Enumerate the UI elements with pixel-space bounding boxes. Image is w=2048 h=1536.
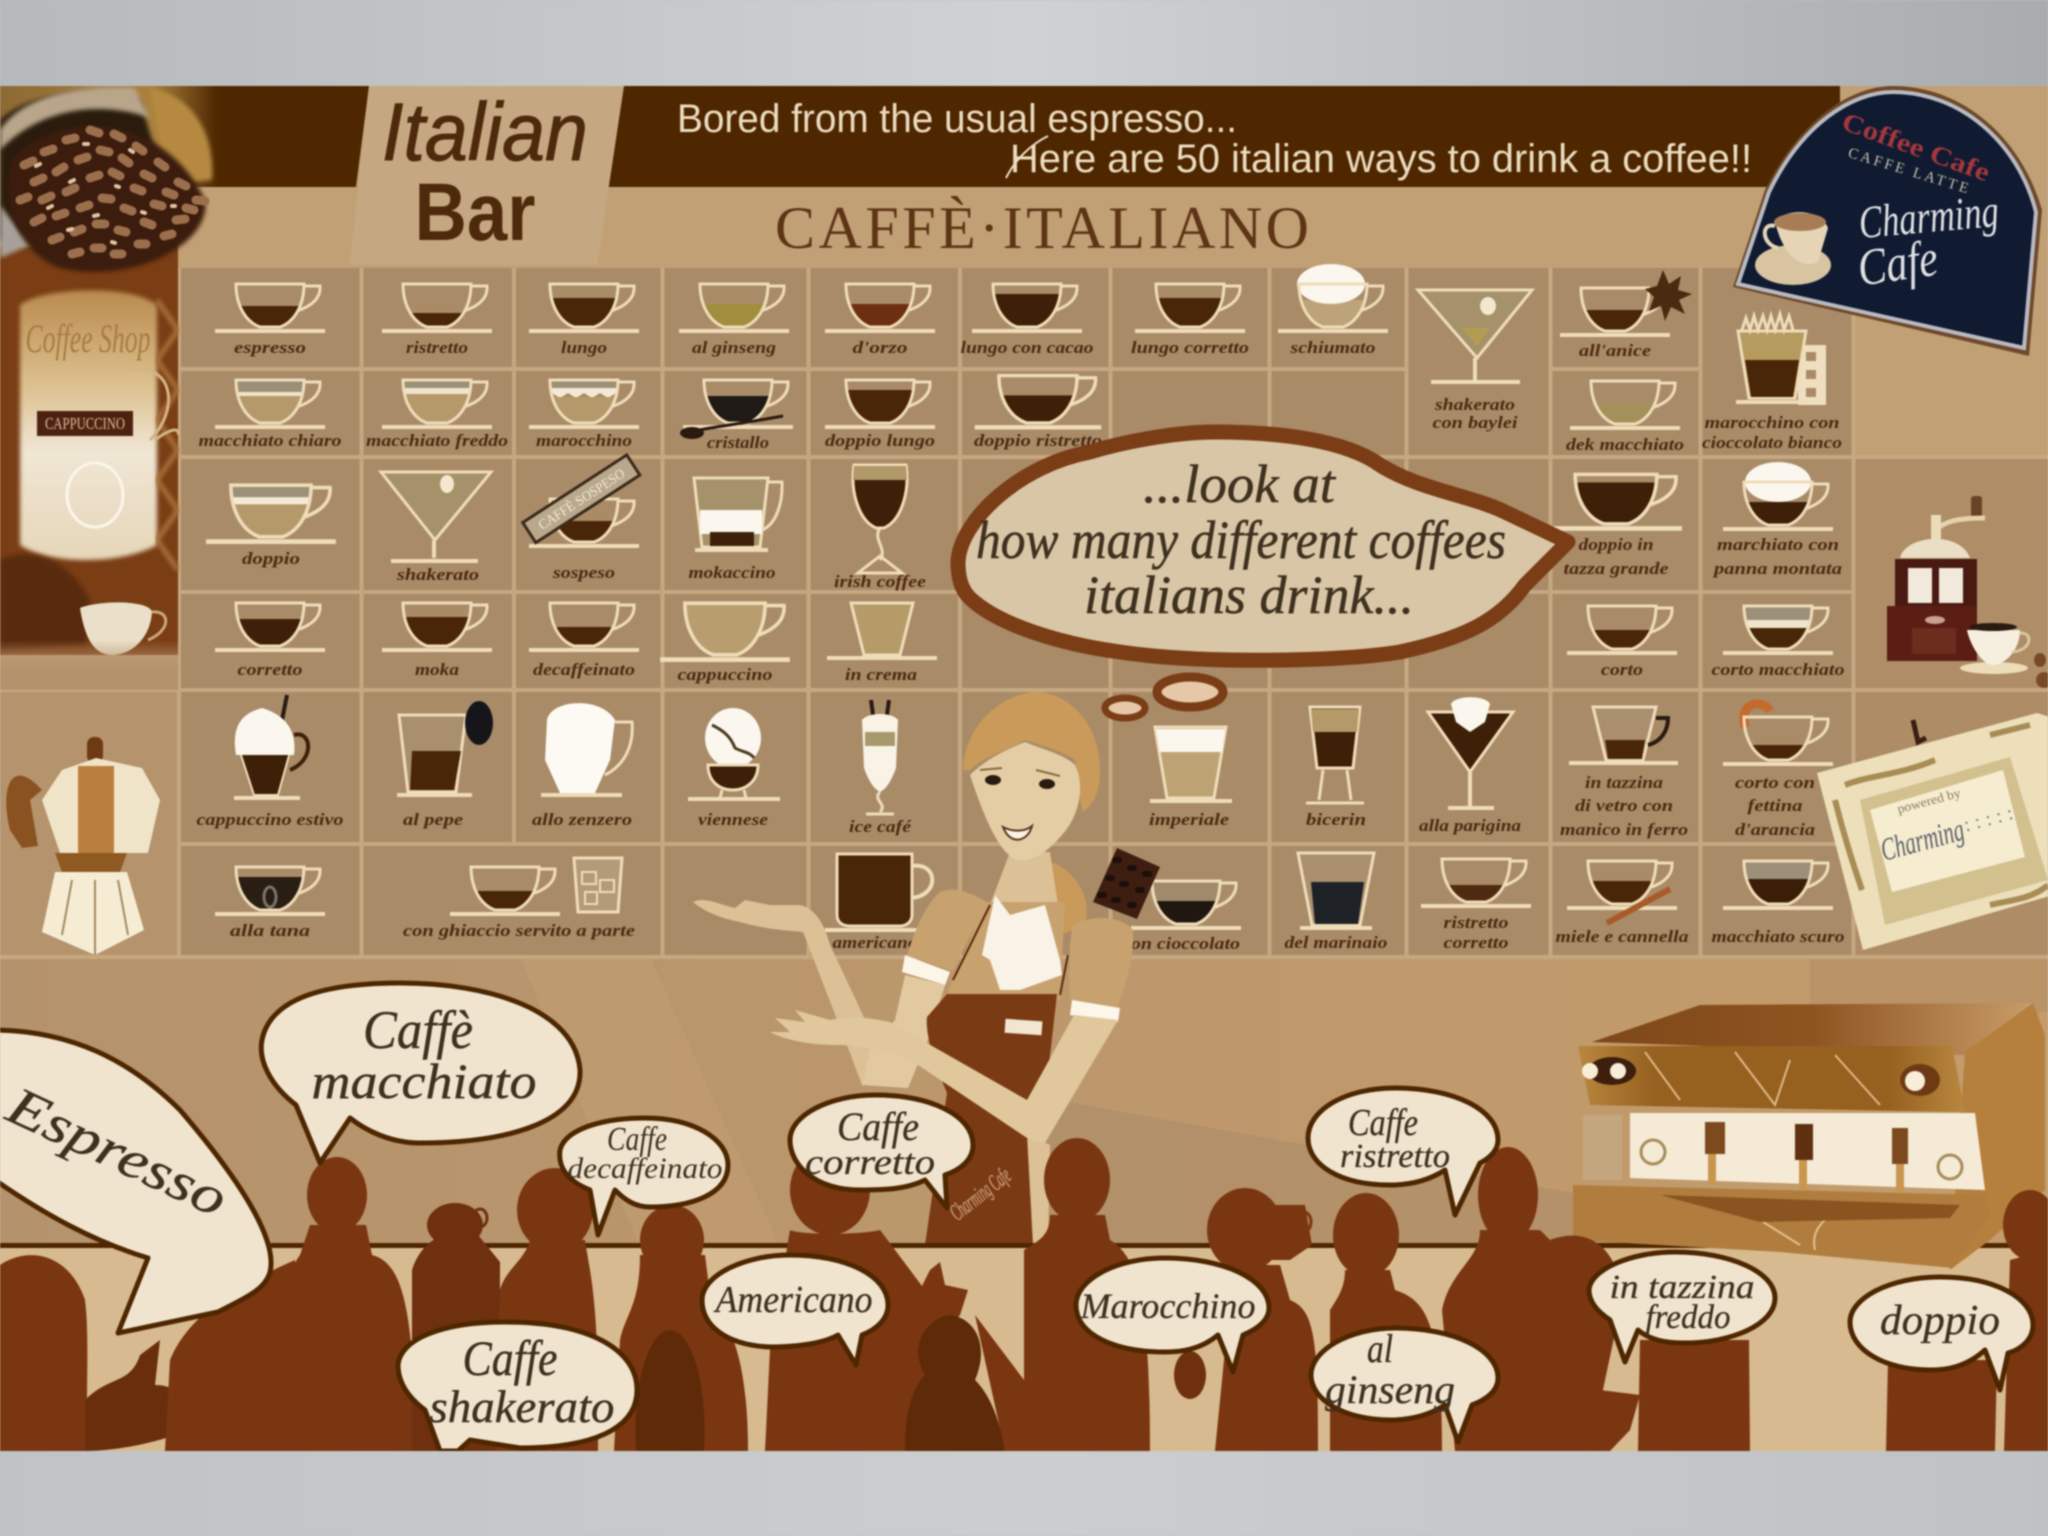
glass: cappuccino estivo: cappuccino estivo <box>196 810 344 829</box>
charming cafe logo on apron: Charming Cafe <box>945 1163 1016 1226</box>
framed sponsor picture: Charming <box>1876 811 1968 868</box>
cup: macchiato freddo <box>366 380 508 450</box>
speech bubble: Caffe corretto: corretto <box>805 1142 935 1182</box>
tin label: CAPPUCCINO <box>45 414 125 433</box>
cup: ristretto corretto <box>1421 859 1531 952</box>
glass: ice café: ice café <box>849 817 913 836</box>
cup: corto <box>1567 606 1677 679</box>
cup: mokaccino: mokaccino <box>688 563 776 582</box>
tin label <box>20 290 178 570</box>
cup: corto con fettina d'arancia: fettina <box>1748 796 1803 815</box>
speech bubble: Caffe decaffeinato <box>560 1118 728 1235</box>
speech bubble: Americano <box>702 1255 888 1365</box>
hair back and ponytail <box>1045 860 1087 935</box>
cup: cristallo: cristallo <box>707 433 769 452</box>
café sign: Charming <box>1857 185 2001 248</box>
glass: shakerato con baylei: shakerato <box>1434 395 1515 414</box>
person: fifth <box>495 1168 598 1451</box>
person: second <box>165 1260 295 1451</box>
cup: moka <box>382 603 492 679</box>
cup: marchiato con panna montata <box>1712 462 1843 578</box>
person: far right <box>2003 1190 2048 1451</box>
mug: americano <box>825 854 932 952</box>
speech bubble: doppio <box>1850 1277 2033 1390</box>
left sleeve <box>907 890 987 971</box>
hair <box>963 692 1100 812</box>
machine lights <box>1582 1057 1940 1096</box>
cup: espresso <box>215 284 325 357</box>
cup: doppio in tazza grande: tazza grande <box>1564 559 1669 578</box>
cup: con cioccolato <box>1122 881 1241 953</box>
glass: cappuccino estivo <box>196 695 344 829</box>
cup: d'orzo: d'orzo <box>852 338 908 357</box>
cup: doppio: doppio <box>242 549 300 568</box>
cup: sospeso with receipt: sospeso <box>552 563 615 582</box>
cup: lungo con cacao <box>960 284 1094 357</box>
cup: decaffeinato <box>529 603 639 679</box>
wall background <box>0 85 2048 667</box>
tagline <box>677 97 1752 181</box>
cup: lungo <box>529 284 639 357</box>
coffee grid panel <box>0 268 2048 957</box>
cup: ristretto: ristretto <box>406 338 468 357</box>
waitress <box>693 692 1160 1245</box>
counter <box>0 1243 2048 1451</box>
glass: in crema: in crema <box>845 665 918 684</box>
glass: al pepe <box>397 701 493 829</box>
row 5 cups <box>196 695 1833 839</box>
cup: d'orzo <box>825 284 935 357</box>
person: drinking <box>412 1203 500 1451</box>
glass: in crema <box>827 603 937 684</box>
left upper arm <box>862 975 945 1088</box>
cup: doppio lungo: doppio lungo <box>825 431 935 450</box>
glass: shakerato <box>381 472 491 584</box>
left cuff <box>902 955 950 985</box>
speech bubble: look at how many different coffees italians drink: italians drink... <box>1084 565 1414 625</box>
speech bubble: Caffè macchiato: macchiato <box>312 1053 536 1109</box>
cup: dek macchiato: dek macchiato <box>1566 435 1684 454</box>
cup: lungo corretto: lungo corretto <box>1131 338 1249 357</box>
speech bubble: Caffe ristretto: ristretto <box>1340 1138 1450 1175</box>
glass: bicerin: bicerin <box>1306 810 1366 829</box>
glass: imperiale: imperiale <box>1149 810 1230 829</box>
glass: in tazzina di vetro con manico in ferro: di vetro con <box>1575 796 1673 815</box>
cup: miele e cannella <box>1556 861 1689 946</box>
chocolates <box>0 554 90 650</box>
header bar <box>215 86 1840 265</box>
row 3 cups <box>206 455 1843 591</box>
face <box>970 742 1080 860</box>
speech bubble: al ginseng: ginseng <box>1325 1367 1455 1412</box>
speech bubble: Marocchino: Marocchino <box>1079 1286 1256 1326</box>
speech bubble: in tazzina freddo: in tazzina <box>1610 1269 1754 1306</box>
cup: alla tana <box>215 867 325 940</box>
hand holding cup <box>85 1340 188 1451</box>
glass: in tazzina di vetro con manico in ferro: manico in ferro <box>1560 820 1688 839</box>
cup: cappuccino <box>660 603 790 684</box>
cup: corto con fettina d'arancia: d'arancia <box>1735 820 1816 839</box>
glass: in tazzina di vetro con manico in ferro: in tazzina <box>1585 773 1664 792</box>
left forearm and hand <box>693 900 905 1085</box>
speech bubble: in tazzina freddo <box>1589 1252 1775 1362</box>
row 1 cups <box>215 264 1842 452</box>
cup: sospeso with receipt <box>523 455 640 582</box>
café sign <box>1733 86 2042 356</box>
cup: ristretto corretto: ristretto <box>1444 913 1508 932</box>
cup: decaffeinato: decaffeinato <box>533 660 635 679</box>
speech bubble: Caffe corretto: Caffe <box>837 1104 919 1149</box>
cup: ristretto <box>382 284 492 357</box>
coffee bean sack and tin <box>0 86 218 690</box>
row 6 cups <box>215 853 1844 953</box>
speech bubble: Espresso: Espresso <box>0 1074 237 1229</box>
speech bubble: look at how many different coffees italians drink: ...look at <box>1143 454 1337 514</box>
Italian Bar label: Italian <box>382 87 588 178</box>
raised hand <box>900 1262 968 1345</box>
cup: macchiato chiaro: macchiato chiaro <box>198 431 342 450</box>
cup: macchiato scuro <box>1712 861 1844 946</box>
glass: al pepe: al pepe <box>403 810 464 829</box>
coffee beans <box>8 126 205 272</box>
chocolate bar <box>1093 848 1160 919</box>
glass: shakerato: shakerato <box>396 565 479 584</box>
framed sponsor picture: powered by <box>1896 785 1963 816</box>
glass: shakerato con baylei: con baylei <box>1432 413 1518 432</box>
sign cup <box>1755 212 1831 285</box>
glass: alla parigina <box>1419 697 1522 835</box>
tin label: Coffee Shop <box>26 316 150 361</box>
cup: marocchino: marocchino <box>536 431 632 450</box>
person: under tazzina bubble <box>1638 1340 1750 1451</box>
cup: doppio <box>206 485 336 568</box>
raised arm <box>975 1315 1024 1451</box>
speech bubble: look at how many different coffees italians drink <box>958 432 1568 660</box>
cup: cappuccino: cappuccino <box>678 665 772 684</box>
cup: corto: corto <box>1601 660 1643 679</box>
neck <box>990 852 1058 905</box>
café sign: CAFFE LATTE <box>1846 145 1970 197</box>
person: seventh <box>765 1145 925 1451</box>
cup: corto con fettina d'arancia <box>1723 704 1833 839</box>
bottom grey strip <box>0 1451 2048 1536</box>
framed sponsor picture: ::::: <box>1961 802 2015 836</box>
cup: lungo con cacao: lungo con cacao <box>960 338 1094 357</box>
Italian Bar label <box>350 86 624 265</box>
glass: marocchino con cioccolato bianco: cioccolato bianco <box>1702 433 1842 452</box>
cup: macchiato scuro: macchiato scuro <box>1712 927 1844 946</box>
row 4 cups <box>215 603 1844 684</box>
glass: shakerato con baylei <box>1418 290 1532 432</box>
right arm and hand <box>770 1010 1118 1143</box>
tagline: Bored from the usual espresso... <box>677 97 1237 141</box>
cup: cristallo <box>680 380 793 452</box>
person: under doppio bubble <box>1886 1360 1997 1451</box>
cup: doppio in tazza grande: doppio in <box>1578 535 1654 554</box>
right cuff <box>1070 1000 1120 1022</box>
person: far left <box>0 1255 88 1451</box>
speech bubble: Marocchino <box>1076 1258 1269 1372</box>
speech bubble: doppio: doppio <box>1880 1298 2000 1344</box>
coffee machine <box>1573 1003 2045 1270</box>
skirt apron <box>925 1093 1035 1245</box>
heading: caffè italiano: CAFFÈ·ITALIANO <box>775 195 1309 261</box>
café sign: Coffee Cafe <box>1838 107 1994 187</box>
framed sponsor picture <box>1817 713 2048 950</box>
café sign: Cafe <box>1854 230 1941 297</box>
cup: doppio lungo <box>825 380 935 450</box>
lower wall <box>0 957 2048 1247</box>
person: ninth <box>1024 1138 1150 1451</box>
coffee grinder <box>1887 496 1985 661</box>
tagline: Here are 50 italian ways to drink a coffee!! <box>1010 137 1752 181</box>
cup: miele e cannella: miele e cannella <box>1556 927 1689 946</box>
cup: alla tana: alla tana <box>230 921 311 940</box>
speech bubble: Caffe ristretto: Caffe <box>1348 1102 1418 1144</box>
person: sixth <box>614 1205 748 1451</box>
speech bubble: Caffe corretto <box>790 1095 973 1208</box>
speech bubble: Caffe shakerato: Caffe <box>462 1330 558 1386</box>
speech bubble: in tazzina freddo: freddo <box>1646 1299 1730 1336</box>
cup: mokaccino <box>688 478 782 582</box>
glass: marocchino con cioccolato bianco: marocchino con <box>1704 413 1840 432</box>
cup: espresso: espresso <box>234 338 306 357</box>
glass: in tazzina di vetro con manico in ferro <box>1560 707 1688 839</box>
cup: all'anice: all'anice <box>1579 341 1652 360</box>
cup: macchiato freddo: macchiato freddo <box>366 431 508 450</box>
speech bubble: Americano: Americano <box>713 1279 872 1321</box>
Italian Bar label: Bar <box>414 167 536 258</box>
moka pot <box>6 737 160 955</box>
torso <box>945 902 1065 1000</box>
cup: marchiato con panna montata: marchiato con <box>1717 535 1839 554</box>
cup: corretto: corretto <box>238 660 302 679</box>
cup: dek macchiato <box>1566 381 1684 454</box>
cup: doppio ristretto: doppio ristretto <box>974 431 1102 450</box>
glass: irish coffee: irish coffee <box>834 572 927 591</box>
speech bubble: look at how many different coffees italians drink: how many different coffees <box>976 510 1506 570</box>
top grey strip <box>0 0 2048 86</box>
cup: macchiato chiaro <box>198 380 342 450</box>
cup and iced glass: con ghiaccio servito a parte <box>403 858 636 940</box>
glass: viennese <box>688 708 780 829</box>
cup: sospeso with receipt: CAFFÈ SOSPESO <box>535 465 628 534</box>
speech bubble: Caffe decaffeinato: decaffeinato <box>568 1152 722 1185</box>
speech bubble: al ginseng <box>1311 1326 1498 1442</box>
glass: marocchino con cioccolato bianco <box>1702 314 1842 452</box>
cup: corto macchiato: corto macchiato <box>1712 660 1844 679</box>
speech bubble: Caffè macchiato <box>261 983 580 1163</box>
person: drinking right <box>1174 1188 1318 1451</box>
small cup by grinder <box>1960 623 2048 688</box>
cup: moka: moka <box>415 660 460 679</box>
cup: corto con fettina d'arancia: corto con <box>1735 773 1815 792</box>
speech bubble: Caffe shakerato: shakerato <box>430 1381 614 1432</box>
cup: al ginseng <box>679 284 789 357</box>
person: tall <box>1442 1147 1640 1451</box>
speech bubble: Caffe ristretto <box>1308 1088 1498 1215</box>
person: twelfth <box>1330 1193 1442 1451</box>
cup and iced glass: con ghiaccio servito a parte: con ghiaccio servito a parte <box>403 921 636 940</box>
speech bubble: Espresso <box>0 1030 271 1333</box>
speech bubble: Caffè macchiato: Caffè <box>363 1000 473 1060</box>
cup: marchiato con panna montata: panna montata <box>1712 559 1843 578</box>
glass: irish coffee <box>834 465 927 591</box>
cup: marocchino <box>529 380 639 450</box>
glass: alla parigina: alla parigina <box>1419 816 1522 835</box>
mug: americano: americano <box>832 933 918 952</box>
row 2 cups <box>198 376 1684 454</box>
cup: con cioccolato: con cioccolato <box>1122 934 1240 953</box>
glass: del marinaio <box>1284 853 1388 952</box>
cup: doppio in tazza grande <box>1550 474 1682 578</box>
mug: allo zenzero: allo zenzero <box>532 810 632 829</box>
mug: allo zenzero <box>532 703 632 829</box>
cup: al ginseng: al ginseng <box>692 338 777 357</box>
speech bubble: al ginseng: al <box>1367 1326 1393 1371</box>
cup: schiumato <box>1278 264 1388 357</box>
white blouse <box>982 895 1062 990</box>
cup: doppio ristretto <box>974 376 1102 450</box>
right sleeve <box>1070 918 1133 1009</box>
glass: bicerin <box>1306 707 1366 829</box>
glass: imperiale <box>1149 727 1232 829</box>
crowd silhouettes <box>0 1138 2048 1451</box>
cup: lungo: lungo <box>561 338 607 357</box>
speech bubble: Caffe decaffeinato: Caffe <box>607 1121 667 1158</box>
cup: ristretto corretto: corretto <box>1444 933 1508 952</box>
glass: ice café <box>849 700 913 836</box>
cup: lungo corretto <box>1131 284 1249 357</box>
eyes and mouth <box>980 768 1060 840</box>
apron bib <box>927 994 1057 1140</box>
thought bubbles <box>1105 677 1223 718</box>
cup: schiumato: schiumato <box>1289 338 1376 357</box>
cup: corto macchiato <box>1712 606 1844 679</box>
person: front dark <box>905 1315 1005 1451</box>
glass: viennese: viennese <box>698 810 769 829</box>
name tag <box>1005 1019 1042 1035</box>
glass: del marinaio: del marinaio <box>1284 933 1388 952</box>
machine panels <box>1583 1113 1985 1192</box>
speech bubble: Caffe shakerato <box>398 1322 637 1451</box>
cup: corretto <box>215 603 325 679</box>
small china cup <box>80 602 166 655</box>
cup: all'anice <box>1560 270 1692 360</box>
person: third <box>282 1157 415 1451</box>
